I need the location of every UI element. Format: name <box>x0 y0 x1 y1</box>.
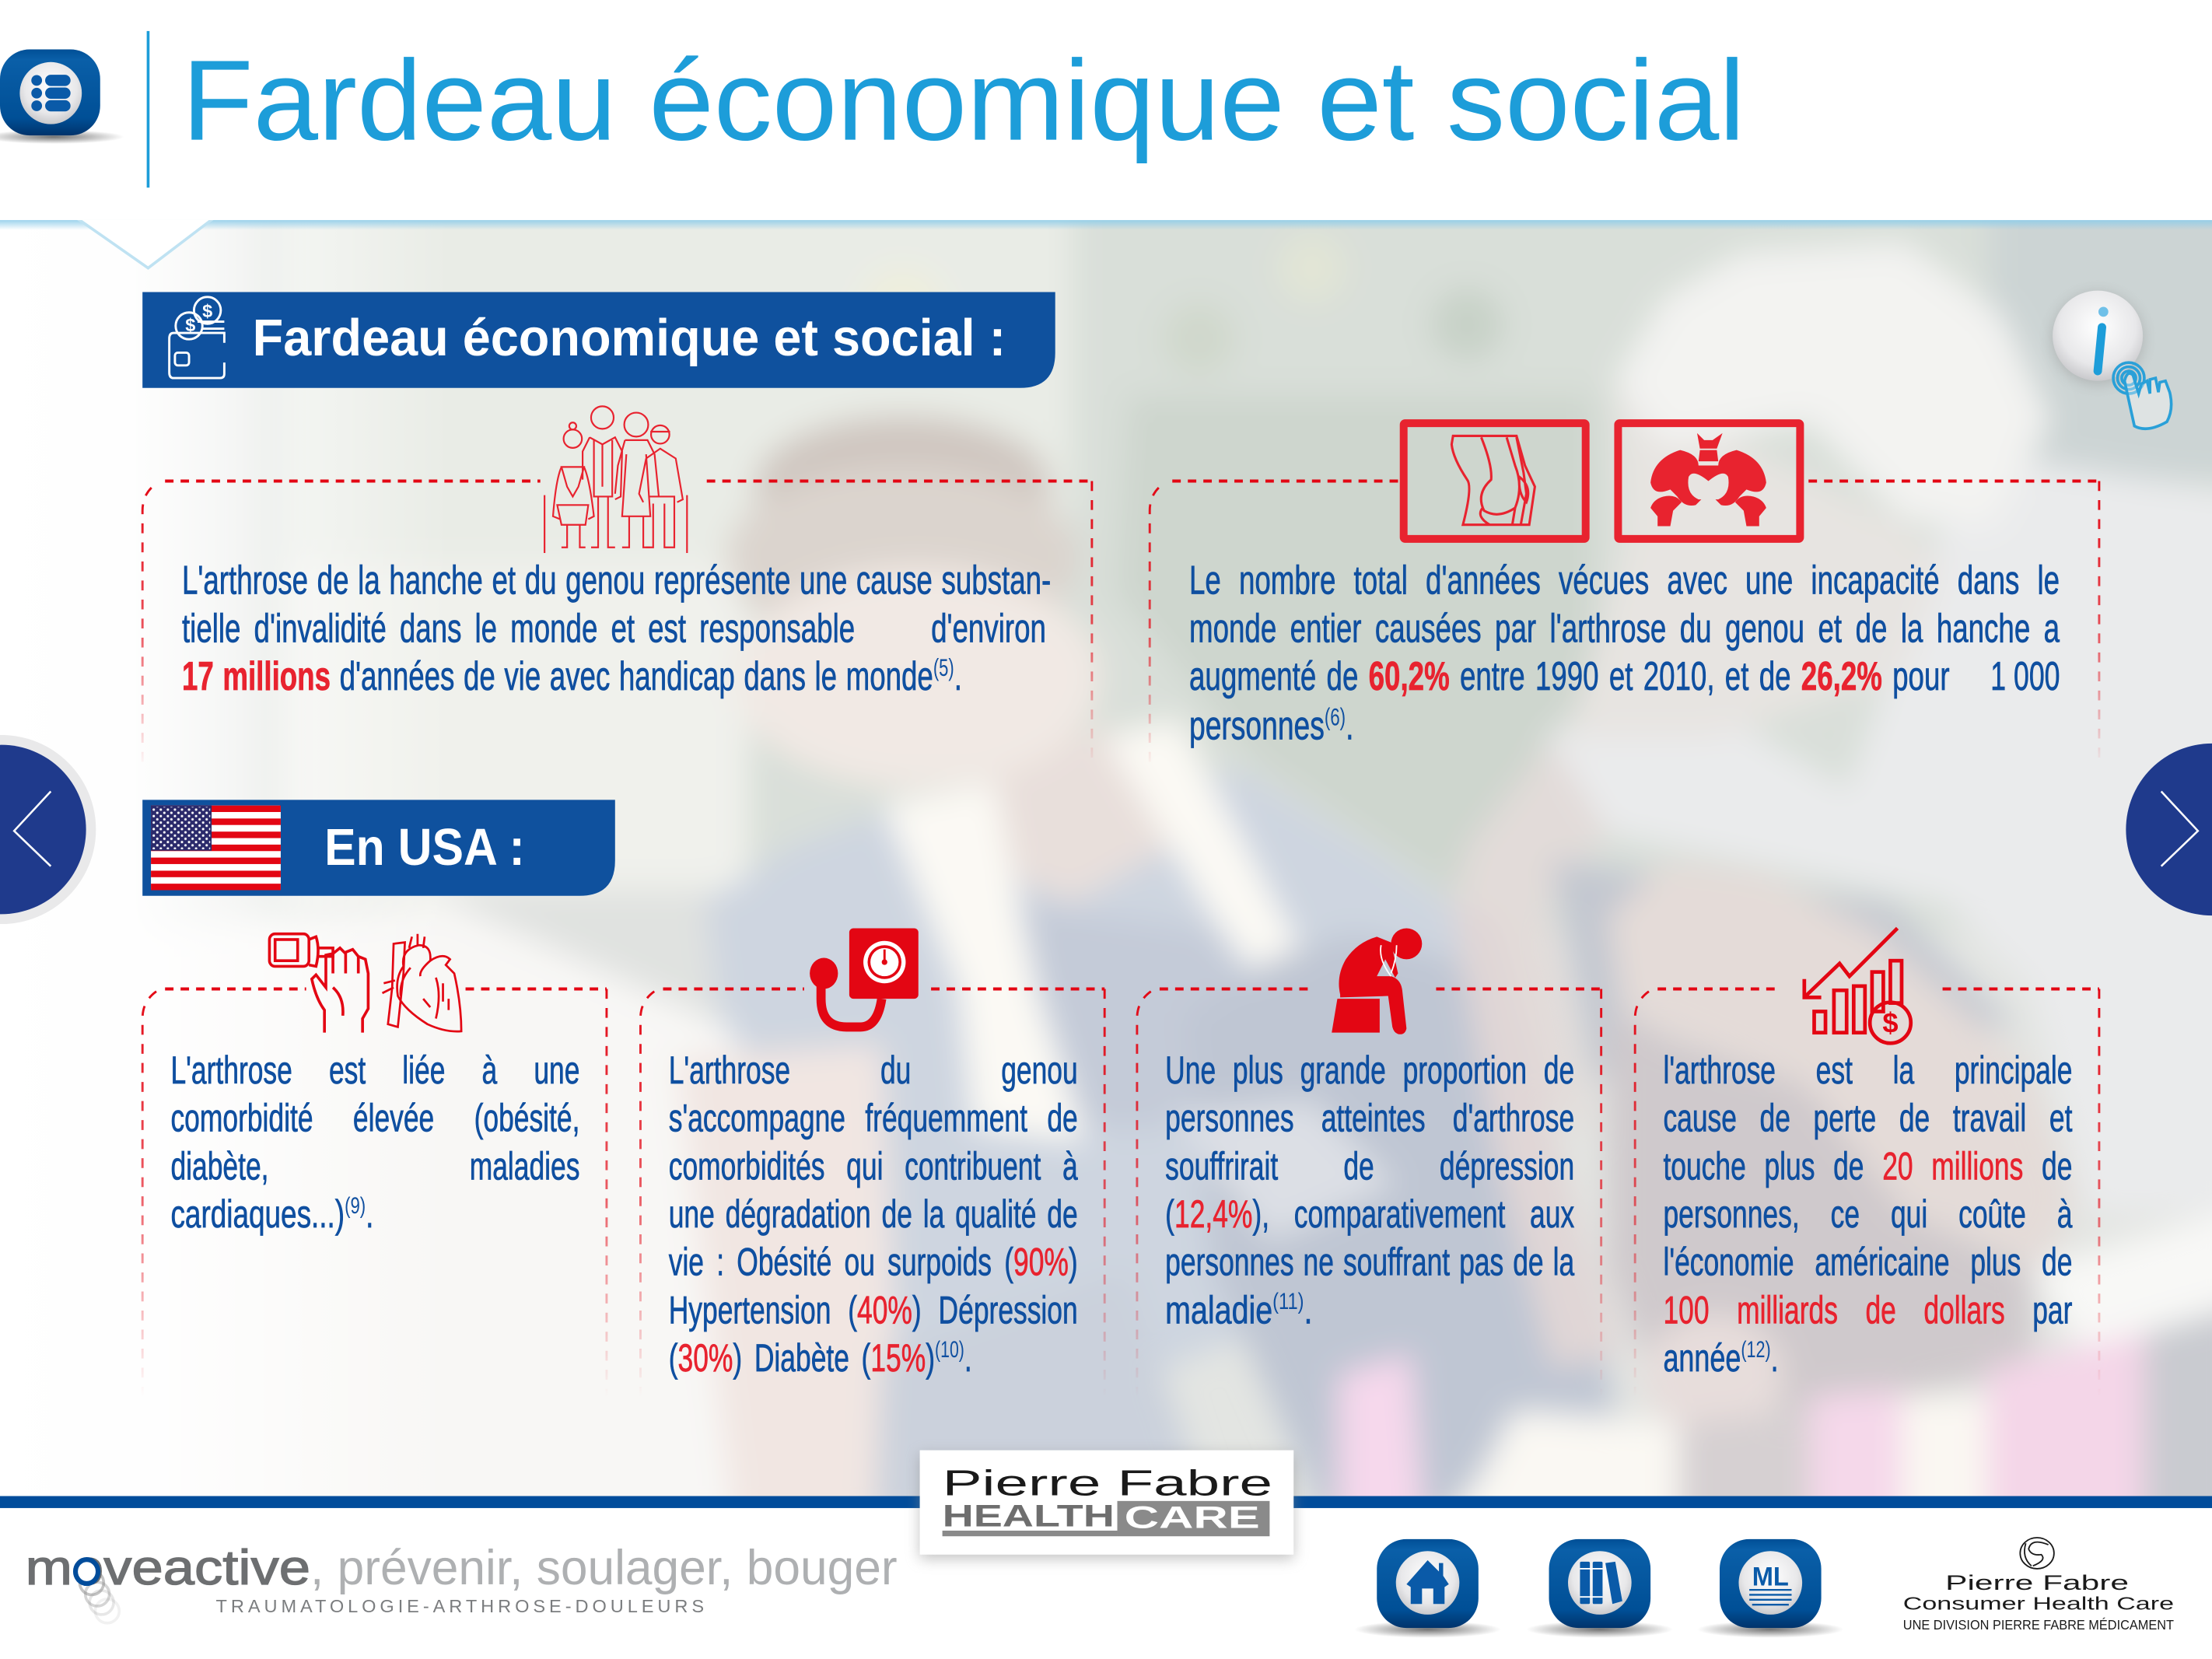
dashed frame with blood pressure icon <box>639 929 1106 1380</box>
icon: menu button <box>0 50 120 143</box>
header band <box>0 31 2212 270</box>
logo: Pierre Fabre Consumer Health Care: UNE DIVISION PIERRE FABRE MÉDICAMENT <box>1903 1617 2174 1633</box>
text block: l'arthrose est la principale <box>1663 1048 2072 1092</box>
dashed frame with depressed person icon <box>1136 929 1602 1380</box>
heading: Fardeau économique et social <box>142 292 1055 388</box>
text block: personnes, ce qui coûte à <box>1663 1192 2072 1236</box>
text block: 1 000 <box>1990 655 2060 700</box>
text block: tielle d'invalidité dans le monde et est responsable <box>182 607 855 652</box>
dashed frame with knee and hip icons <box>1148 419 2100 762</box>
text block: Hypertension (40%) Dépression <box>669 1288 1078 1332</box>
logo: moveactive tagline: , prévenir, soulager, bouger <box>310 1541 898 1595</box>
logo: Pierre Fabre Health Care: Pierre Fabre <box>943 1463 1272 1503</box>
text block: diabète, maladies <box>170 1144 579 1188</box>
logo: moveactive tagline <box>0 1531 903 1629</box>
heading: En USA: En USA : <box>324 818 525 877</box>
panel: depression <box>1136 929 1602 1380</box>
text block: d'environ <box>931 607 1046 652</box>
text block <box>182 558 1051 700</box>
icon: ML button: ML <box>1752 1563 1789 1592</box>
text block: comorbidités qui contribuent à <box>669 1144 1078 1188</box>
title: Fardeau économique et social <box>182 37 1745 165</box>
icon: US flag <box>151 806 281 890</box>
icon: home button <box>1350 1531 1505 1643</box>
arrow: previous <box>0 735 96 924</box>
dashed frame with family icon <box>142 405 1094 762</box>
logo: Pierre Fabre Health Care: HEALTH <box>943 1500 1115 1534</box>
text block <box>669 1048 1078 1380</box>
logo: Pierre Fabre Health Care <box>920 1451 1293 1563</box>
text block: maladie(11). <box>1165 1288 1312 1332</box>
text block: vie : Obésité ou surpoids (90%) <box>669 1240 1078 1284</box>
arrow: next <box>2126 744 2212 916</box>
text block <box>1663 1047 2072 1383</box>
text block <box>170 1048 579 1236</box>
text block: cardiaques...)(9). <box>170 1192 373 1236</box>
dashed frame with falling chart and dollar icon: $ <box>1882 1007 1899 1039</box>
text block: souffrirait de dépression <box>1165 1144 1574 1188</box>
panel: economic cost <box>1633 927 2100 1380</box>
panel: comorbidity <box>142 932 608 1380</box>
heading: Fardeau économique et social: $ <box>202 301 212 321</box>
text block: s'accompagne fréquemment de <box>669 1096 1078 1140</box>
heading: Fardeau économique et social: $ <box>185 315 195 335</box>
logo: Pierre Fabre Health Care: CARE <box>1125 1500 1260 1535</box>
text block: 17 millions d'années de vie avec handicap dans le monde(5). <box>182 655 962 700</box>
panel: quality of life <box>639 929 1106 1380</box>
text block: comorbidité élevée (obésité, <box>170 1096 579 1140</box>
text block: 100 milliards de dollars par <box>1663 1288 2072 1332</box>
text block: augmenté de 60,2% entre 1990 et 2010, et de 26,2% pour <box>1189 655 1950 700</box>
icon: library button <box>1522 1531 1678 1643</box>
text block: L'arthrose de la hanche et du genou représente une cause substan- <box>182 558 1051 604</box>
logo: Pierre Fabre Consumer Health Care: Consumer Health Care <box>1903 1594 2174 1614</box>
logo: moveactive tagline: TRAUMATOLOGIE-ARTHROSE-DOULEURS <box>216 1596 704 1616</box>
panel: global disability <box>142 405 1094 762</box>
text block: l'économie américaine plus de <box>1663 1240 2072 1284</box>
text block: Le nombre total d'années vécues avec une incapacité dans le <box>1189 558 2060 604</box>
dashed frame with falling chart and dollar icon <box>1635 924 2099 1397</box>
logo: Pierre Fabre Consumer Health Care <box>1898 1535 2179 1633</box>
text block: Une plus grande proportion de <box>1165 1048 1574 1092</box>
text block: L'arthrose est liée à une <box>170 1048 579 1092</box>
text block: personnes atteintes d'arthrose <box>1165 1096 1574 1140</box>
text block: année(12). <box>1663 1336 1779 1380</box>
dashed frame with glucometer, hand and heart icons <box>142 932 608 1380</box>
text block: (12,4%), comparativement aux <box>1165 1192 1574 1236</box>
icon: information button with hand <box>2049 289 2173 431</box>
text block: monde entier causées par l'arthrose du genou et de la hanche a <box>1189 607 2060 652</box>
text block: une dégradation de la qualité de <box>669 1192 1078 1236</box>
text block: L'arthrose du genou <box>669 1048 1078 1092</box>
text block: cause de perte de travail et <box>1663 1096 2072 1140</box>
text block: personnes(6). <box>1189 704 1353 749</box>
text block: touche plus de 20 millions de <box>1663 1144 2072 1188</box>
panel: years lived with disability <box>1148 419 2100 762</box>
text block: (30%) Diabète (15%)(10). <box>669 1336 972 1380</box>
icon: ML button <box>1693 1531 1848 1643</box>
text block <box>1189 558 2060 749</box>
text block: personnes ne souffrant pas de la <box>1165 1240 1574 1284</box>
heading: En USA <box>142 800 615 896</box>
text block <box>1165 1048 1574 1332</box>
logo: Pierre Fabre Consumer Health Care: Pierre Fabre <box>1945 1570 2129 1594</box>
logo: moveactive tagline: moveactive <box>26 1541 310 1595</box>
heading: Fardeau économique et social: Fardeau économique et social : <box>253 309 1006 367</box>
